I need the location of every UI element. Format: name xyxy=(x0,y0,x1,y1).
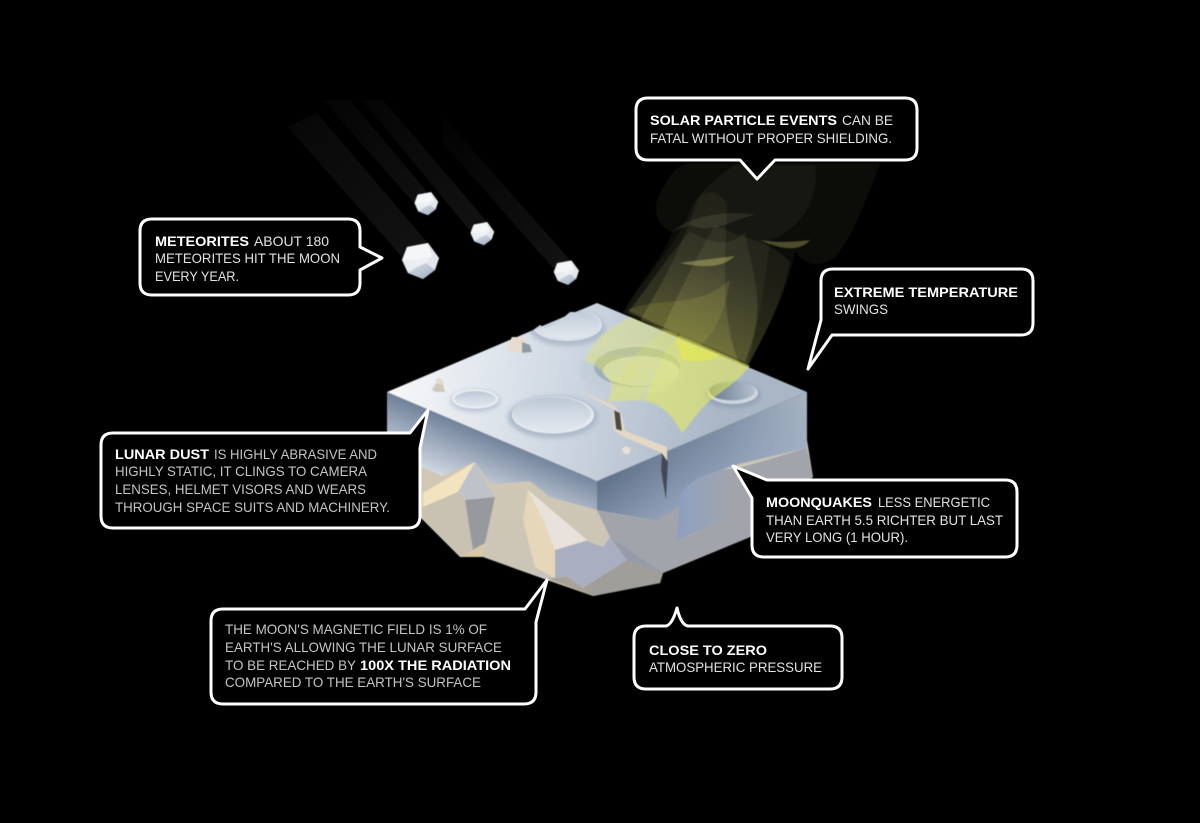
callout text: lunar dust xyxy=(115,446,390,515)
front blue boulder xyxy=(555,537,627,588)
craters xyxy=(450,309,761,438)
callout text: close to zero: ATMOSPHERIC PRESSURE xyxy=(649,659,822,675)
callout text: lunar dust: LENSES, HELMET VISORS AND WEARS xyxy=(115,481,366,497)
callout text: moonquakes xyxy=(766,494,1003,545)
callout text: solar particle events xyxy=(650,112,893,146)
crack xyxy=(578,390,668,500)
callout text: magnetic field: THE MOON'S MAGNETIC FIELD IS 1% OF xyxy=(225,621,487,637)
callout text: meteorites: METEORITES xyxy=(155,233,249,249)
callout text: meteorites xyxy=(155,233,340,284)
callout: meteorites xyxy=(140,219,382,295)
yellow solar veils on surface xyxy=(585,317,750,433)
callout text: meteorites: ABOUT 180 xyxy=(254,233,329,249)
callout: moonquakes xyxy=(733,466,1017,557)
callout text: magnetic field xyxy=(225,621,511,690)
moon surface block xyxy=(387,303,813,596)
crater right xyxy=(705,382,761,408)
right side face lower tint xyxy=(597,392,807,520)
crater middle xyxy=(508,396,598,438)
crater small left xyxy=(450,390,500,412)
crater large xyxy=(594,347,679,386)
callout text: solar particle events: SOLAR PARTICLE EVENTS xyxy=(650,112,837,128)
meteor trails xyxy=(288,100,570,268)
callout text: extreme temperature: SWINGS xyxy=(834,301,888,317)
callout text: lunar dust: HIGHLY STATIC, IT CLINGS TO CAMERA xyxy=(115,463,368,479)
callout text: solar particle events: CAN BE xyxy=(842,112,893,128)
crater back xyxy=(529,309,605,346)
callout text: lunar dust: LUNAR DUST xyxy=(115,446,209,462)
lower rock body xyxy=(415,440,813,596)
callout: extreme temperature xyxy=(808,269,1033,369)
callout text: extreme temperature: EXTREME TEMPERATURE xyxy=(834,284,1018,300)
callout text: meteorites: METEORITES HIT THE MOON xyxy=(155,250,340,266)
callout text: moonquakes: MOONQUAKES xyxy=(766,494,872,510)
left side face xyxy=(387,392,597,510)
blue arch on right body xyxy=(677,468,735,540)
small rocks xyxy=(432,337,631,454)
top surface xyxy=(387,303,807,481)
callout text: meteorites: EVERY YEAR. xyxy=(155,268,239,284)
bottom facets xyxy=(547,520,725,596)
left boulder xyxy=(423,462,495,557)
callout: close to zero xyxy=(634,608,842,689)
right lower rock xyxy=(593,448,813,596)
callout: solar particle events xyxy=(636,98,917,179)
callout text: magnetic field: COMPARED TO THE EARTH'S SURFACE xyxy=(225,674,481,690)
callout text: extreme temperature xyxy=(834,284,1018,317)
meteorites xyxy=(402,192,579,285)
callout text: close to zero xyxy=(649,642,822,675)
callout text: moonquakes: THAN EARTH 5.5 RICHTER BUT LAST xyxy=(766,512,1003,528)
callout: lunar dust xyxy=(101,410,428,528)
solar particle plume xyxy=(623,163,880,367)
callout: magnetic field xyxy=(211,580,547,704)
callout text: lunar dust: THROUGH SPACE SUITS AND MACHINERY. xyxy=(115,499,390,515)
callout text: moonquakes: VERY LONG (1 HOUR). xyxy=(766,529,908,545)
right side face xyxy=(597,392,807,520)
callout text: lunar dust: IS HIGHLY ABRASIVE AND xyxy=(214,446,377,462)
callout text: magnetic field: 100X THE RADIATION xyxy=(360,657,511,673)
edge bump xyxy=(533,312,576,330)
callout text: close to zero: CLOSE TO ZERO xyxy=(649,642,767,658)
central boulder xyxy=(523,490,587,578)
callout text: magnetic field: EARTH'S ALLOWING THE LUNAR SURFACE xyxy=(225,639,502,655)
callout text: magnetic field: TO BE REACHED BY xyxy=(225,657,357,673)
callout text: solar particle events: FATAL WITHOUT PROPER SHIELDING. xyxy=(650,130,892,146)
callout text: moonquakes: LESS ENERGETIC xyxy=(878,494,990,510)
